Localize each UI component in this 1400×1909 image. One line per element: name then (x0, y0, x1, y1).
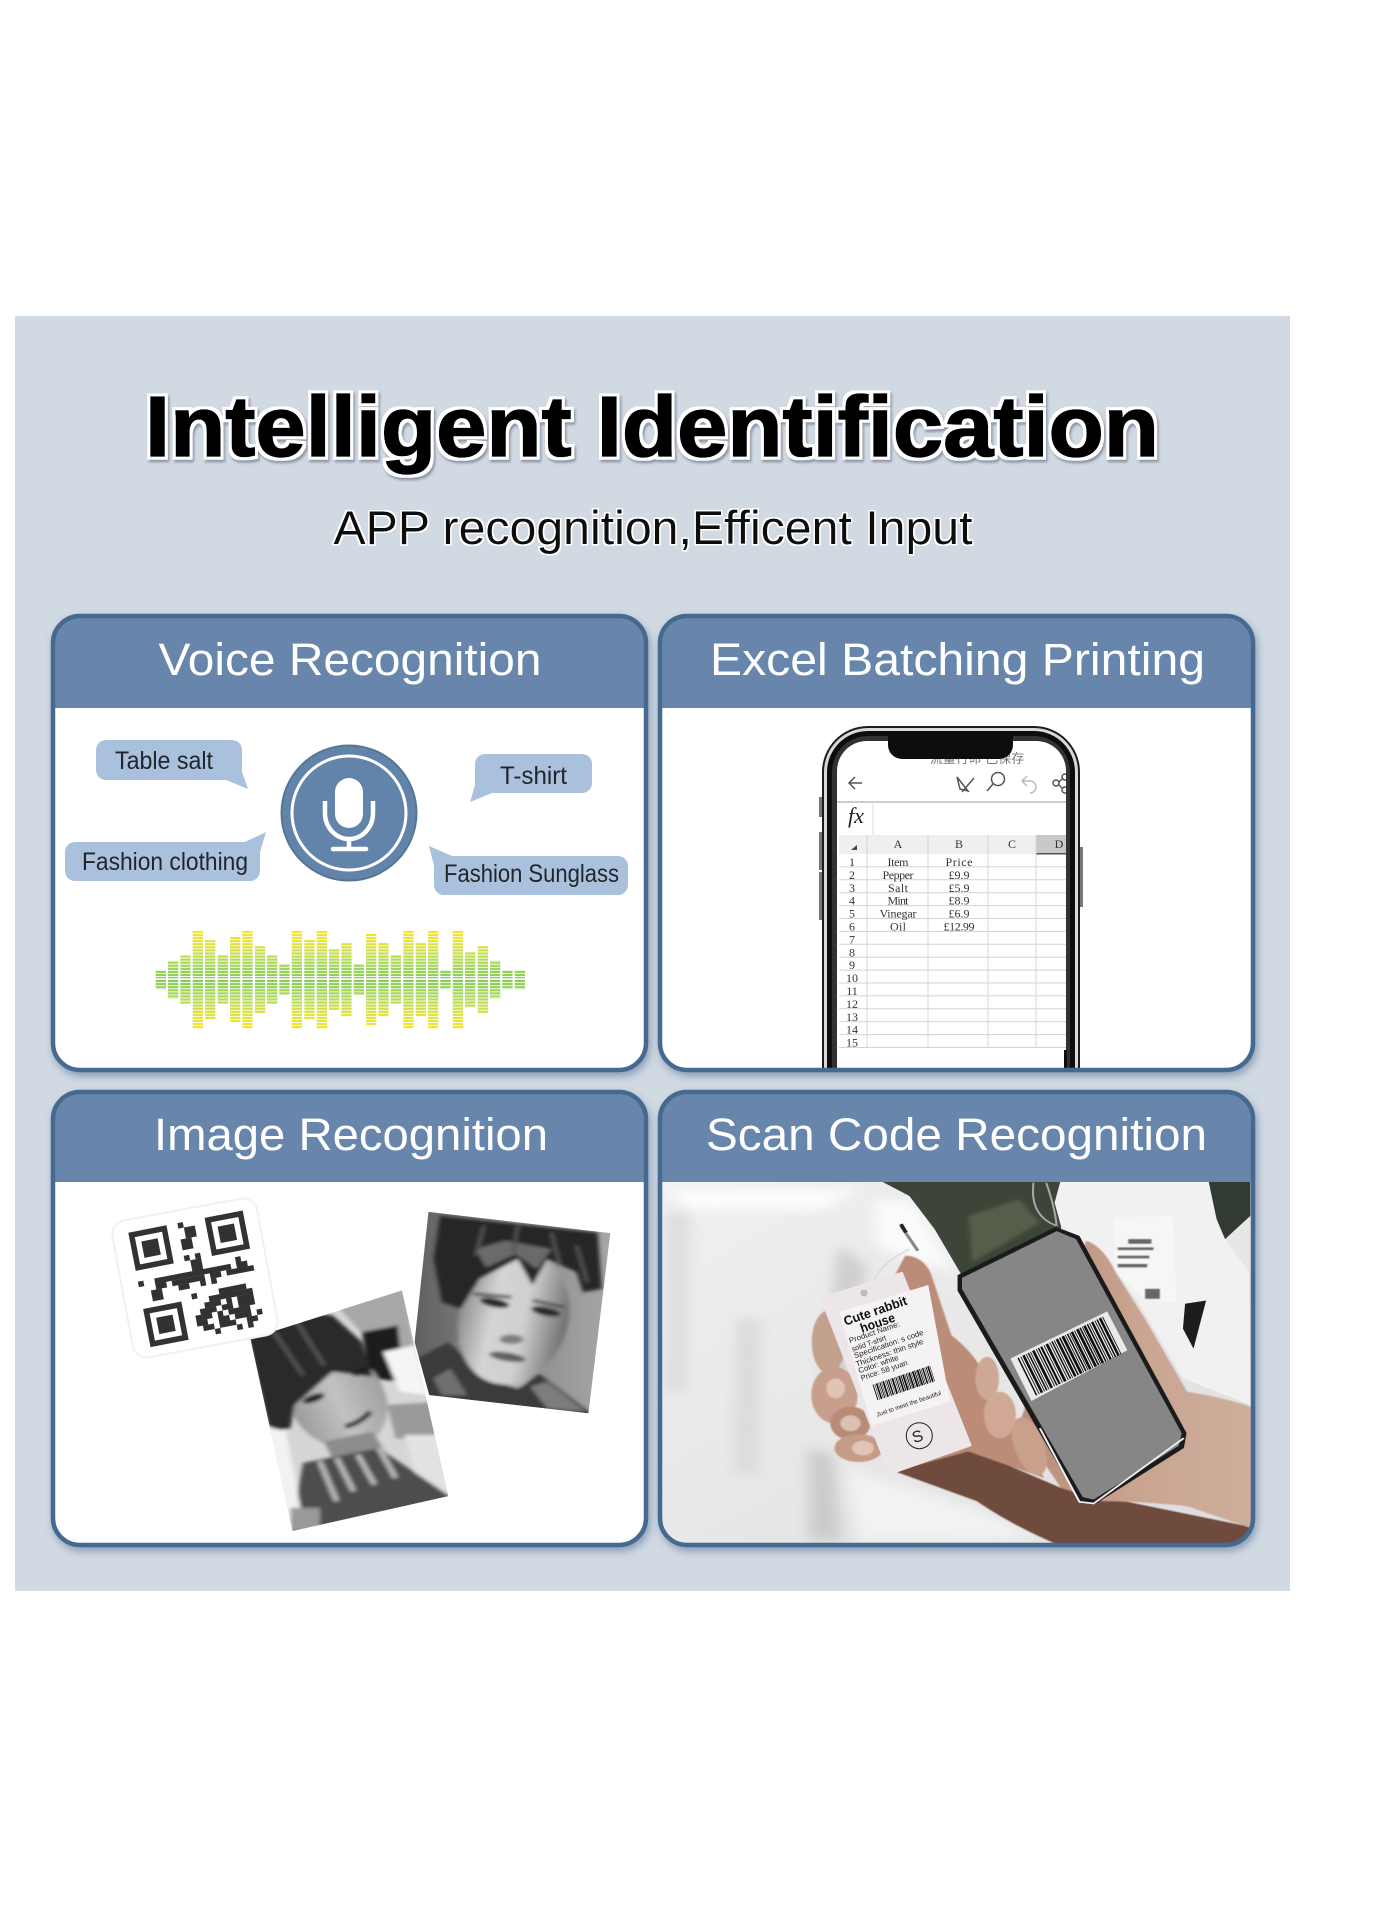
printed hang tag: Cute rabbit (842, 1293, 909, 1329)
excel heading: Excel Batching Printing (710, 634, 1205, 685)
phone notch (888, 736, 1013, 759)
phone showing barcode (959, 1228, 1185, 1503)
spreadsheet: 13 (846, 1010, 858, 1024)
excel header band (660, 616, 1253, 708)
spreadsheet: A (894, 837, 903, 851)
printed hang tag: S (910, 1427, 926, 1447)
speech bubble: table salt: Table salt (115, 747, 213, 775)
spreadsheet: Price (946, 855, 972, 869)
panel: excel batch printing (654, 612, 1262, 1082)
sound waveform (150, 928, 530, 1032)
speech bubble: fashion clothing: Fashion clothing (82, 848, 248, 876)
qr code modules (128, 1210, 265, 1347)
printed hang tag: solid T-shirt (850, 1333, 888, 1354)
title: Intelligent Identification (145, 380, 1159, 475)
image heading: Image Recognition (154, 1109, 548, 1160)
spreadsheet: Item (888, 855, 909, 869)
spreadsheet: Salt (888, 881, 909, 895)
formula bar: fx (848, 803, 864, 828)
voice header band (53, 616, 646, 708)
spreadsheet: 9 (849, 958, 855, 972)
photo: boy portrait (414, 1212, 610, 1414)
spreadsheet (839, 835, 1066, 1050)
speech bubble: fashion sunglass: Fashion Sunglass (444, 860, 619, 888)
spreadsheet: Mint (888, 894, 909, 908)
spreadsheet: D (1055, 837, 1064, 851)
printed hang tag: Just to meet the beautiful (876, 1390, 942, 1419)
status bar text: 流量行命 已保存 (930, 751, 1024, 766)
spreadsheet: C (1008, 837, 1016, 851)
photo: child portrait (244, 1286, 455, 1534)
scan panel border (660, 1092, 1253, 1545)
spreadsheet: £6.9 (948, 907, 970, 921)
scan heading: Scan Code Recognition (706, 1109, 1207, 1160)
image panel border (53, 1092, 646, 1545)
subtitle: APP recognition,Efficent Input (334, 501, 972, 554)
spreadsheet: 10 (846, 971, 858, 985)
spreadsheet: 12 (846, 997, 858, 1011)
printed hang tag (822, 1273, 970, 1473)
spreadsheet: £12.99 (944, 920, 974, 934)
printed hang tag: Price: 58 yuan (859, 1358, 909, 1383)
spreadsheet: 11 (846, 984, 858, 998)
spreadsheet: 4 (849, 894, 855, 908)
spreadsheet: 15 (846, 1036, 858, 1050)
spreadsheet: Oil (890, 920, 907, 934)
background panel (15, 316, 1290, 1591)
speech bubble: fashion clothing (65, 832, 266, 881)
voice panel border (53, 616, 646, 1070)
printed hang tag: Specification: s code (853, 1328, 925, 1360)
image header band (53, 1092, 646, 1182)
app toolbar icons (849, 772, 1068, 793)
spreadsheet: 14 (846, 1023, 858, 1037)
spreadsheet: Vinegar (880, 907, 916, 921)
speech bubble: fashion sunglass (429, 846, 628, 895)
spreadsheet: 8 (849, 945, 855, 959)
printed hang tag: Product Name: (848, 1319, 901, 1345)
spreadsheet: 7 (849, 932, 855, 946)
spreadsheet: £8.9 (948, 894, 970, 908)
spreadsheet: 1 (849, 855, 855, 869)
spreadsheet: Pepper (882, 868, 914, 882)
speech bubble: table salt (96, 740, 248, 789)
spreadsheet: 5 (849, 907, 855, 921)
spreadsheet: 3 (849, 881, 855, 895)
spreadsheet: 2 (849, 868, 855, 882)
printed hang tag: house (858, 1310, 897, 1336)
qr code card (110, 1196, 280, 1360)
arm and hands (811, 1241, 1255, 1544)
spreadsheet: B (955, 837, 963, 851)
photo: hands scanning tag (657, 1179, 1255, 1544)
speech bubble: t-shirt (470, 754, 592, 802)
panel: scan code recognition (657, 1092, 1255, 1545)
excel panel border (660, 616, 1253, 1070)
speech bubble: t-shirt: T-shirt (500, 762, 567, 790)
icon: microphone (282, 746, 416, 880)
printed hang tag: Color: white (857, 1353, 900, 1375)
printed hang tag: Thickness: thin style (854, 1337, 924, 1369)
panel: image recognition (53, 1092, 646, 1545)
voice heading: Voice Recognition (158, 634, 542, 685)
panel: voice recognition (53, 616, 646, 1070)
spreadsheet: £9.9 (948, 868, 970, 882)
spreadsheet: 6 (849, 920, 855, 934)
scan header band (660, 1092, 1253, 1182)
phone with spreadsheet (819, 726, 1083, 1068)
spreadsheet: £5.9 (948, 881, 970, 895)
